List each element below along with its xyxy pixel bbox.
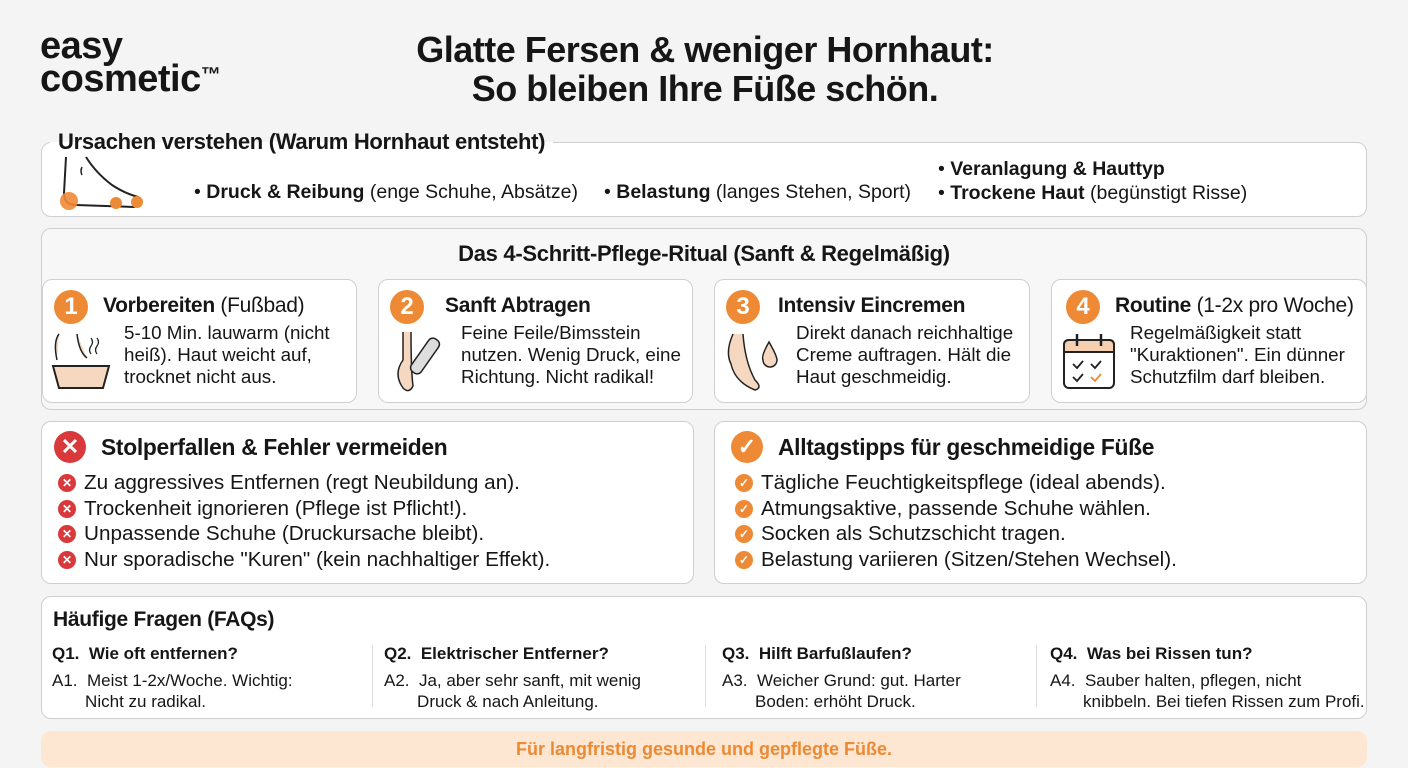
card 1: Vorbereiten (Fußbad) bbox=[103, 294, 304, 317]
mistakes list: ✕ bbox=[62, 552, 72, 566]
faq 3: A3. Weicher Grund: gut. Harter bbox=[722, 671, 961, 690]
heading: ritual: Das 4-Schritt-Pflege-Ritual (Sanft & Regelmäßig) bbox=[458, 241, 950, 266]
footer banner: Für langfristig gesunde und gepflegte Füße. bbox=[516, 739, 892, 759]
mistakes list bbox=[58, 471, 550, 570]
card 2: Richtung. Nicht radikal! bbox=[461, 366, 654, 387]
tips list: Tägliche Feuchtigkeitspflege (ideal abends). bbox=[761, 471, 1166, 494]
mistakes list: Nur sporadische "Kuren" (kein nachhaltiger Effekt). bbox=[84, 548, 550, 570]
tips list: Atmungsaktive, passende Schuhe wählen. bbox=[761, 496, 1151, 520]
icon: foot file bbox=[397, 332, 440, 392]
faq 4: Q4. Was bei Rissen tun? bbox=[1050, 644, 1252, 663]
icon: red x: ✕ bbox=[61, 434, 79, 459]
mistakes list: Trockenheit ignorieren (Pflege ist Pflicht!). bbox=[84, 496, 467, 520]
faq 4: A4. Sauber halten, pflegen, nicht bbox=[1050, 671, 1301, 690]
panel: mistakes bbox=[41, 421, 694, 584]
faq 1: Nicht zu radikal. bbox=[85, 692, 206, 711]
mistakes list: Zu aggressives Entfernen (regt Neubildung an). bbox=[84, 471, 520, 494]
card 2: Sanft Abtragen bbox=[445, 294, 591, 317]
tips list: ✓ bbox=[739, 527, 749, 541]
icon: calendar bbox=[1063, 334, 1115, 389]
tips list: ✓ bbox=[739, 552, 749, 566]
card 2: nutzen. Wenig Druck, eine bbox=[461, 344, 681, 365]
card 3: Creme auftragen. Hält die bbox=[796, 344, 1011, 365]
tips list: Socken als Schutzschicht tragen. bbox=[761, 522, 1066, 545]
heading: mistakes: Stolperfallen & Fehler vermeiden bbox=[101, 434, 447, 460]
card 3: Direkt danach reichhaltige bbox=[796, 322, 1013, 343]
faq 2: Druck & nach Anleitung. bbox=[417, 692, 599, 711]
faq 2: Q2. Elektrischer Entferner? bbox=[384, 644, 609, 663]
panel: ritual bbox=[41, 228, 1367, 410]
mistakes list: Unpassende Schuhe (Druckursache bleibt). bbox=[84, 522, 484, 545]
tips list: Belastung variieren (Sitzen/Stehen Wechsel). bbox=[761, 548, 1177, 570]
card 1: trocknet nicht aus. bbox=[124, 366, 276, 387]
icon: orange check: ✓ bbox=[738, 434, 756, 459]
card 1: heiß). Haut weicht auf, bbox=[124, 344, 312, 365]
logo: easy bbox=[40, 25, 123, 67]
tips list bbox=[735, 471, 1177, 570]
icon: orange check bbox=[731, 431, 763, 463]
faq 3: Boden: erhöht Druck. bbox=[755, 692, 916, 711]
heading: causes: Ursachen verstehen (Warum Hornhaut entsteht) bbox=[58, 129, 545, 154]
faq 2: A2. Ja, aber sehr sanft, mit wenig bbox=[384, 671, 641, 690]
panel: causes bbox=[41, 142, 1367, 217]
card 2 bbox=[378, 279, 693, 403]
card 4 bbox=[1051, 279, 1367, 403]
title: So bleiben Ihre Füße schön. bbox=[472, 68, 938, 109]
logo: cosmetic™ bbox=[40, 58, 220, 100]
card 1 bbox=[42, 279, 357, 403]
panel: causes: • Veranlagung & Hauttyp bbox=[938, 158, 1165, 180]
mistakes list: ✕ bbox=[62, 476, 72, 490]
card 4: Schutzfilm darf bleiben. bbox=[1130, 366, 1325, 387]
card 4: "Kuraktionen". Ein dünner bbox=[1130, 344, 1345, 365]
card 4: Regelmäßigkeit statt bbox=[1130, 322, 1301, 343]
faq 1: Q1. Wie oft entfernen? bbox=[52, 644, 238, 663]
card 1: 1 bbox=[64, 293, 78, 320]
faq 2 bbox=[384, 644, 641, 711]
heading: FAQ: Häufige Fragen (FAQs) bbox=[53, 608, 274, 631]
heading: tips: Alltagstipps für geschmeidige Füße bbox=[778, 434, 1154, 460]
footer banner bbox=[41, 731, 1367, 767]
faq 3 bbox=[722, 644, 961, 711]
card 4: Routine (1-2x pro Woche) bbox=[1115, 294, 1354, 317]
mistakes list: ✕ bbox=[62, 527, 72, 541]
title: Glatte Fersen & weniger Hornhaut: bbox=[416, 29, 994, 70]
panel: tips bbox=[714, 421, 1367, 584]
icon: red x bbox=[54, 431, 86, 463]
logo bbox=[40, 25, 220, 100]
cause list: • Druck & Reibung (enge Schuhe, Absätze) bbox=[194, 181, 578, 203]
panel: causes: • Trockene Haut (begünstigt Risse) bbox=[938, 182, 1247, 204]
card 2: Feine Feile/Bimsstein bbox=[461, 322, 641, 343]
faq 1: A1. Meist 1-2x/Woche. Wichtig: bbox=[52, 671, 293, 690]
panel: causes: • Belastung (langes Stehen, Sport) bbox=[604, 181, 911, 203]
panel: FAQ bbox=[41, 596, 1367, 719]
tips list: ✓ bbox=[739, 476, 749, 490]
card 3: Haut geschmeidig. bbox=[796, 366, 952, 387]
faq 4 bbox=[1050, 644, 1365, 711]
card 3: 3 bbox=[736, 293, 750, 320]
tips list: ✓ bbox=[739, 502, 749, 516]
card 3: Intensiv Eincremen bbox=[778, 294, 965, 317]
mistakes list: ✕ bbox=[62, 502, 72, 516]
faq 1 bbox=[52, 644, 293, 711]
title bbox=[416, 29, 994, 109]
card 1: 5-10 Min. lauwarm (nicht bbox=[124, 322, 330, 343]
card 3 bbox=[714, 279, 1030, 403]
faq 3: Q3. Hilft Barfußlaufen? bbox=[722, 644, 912, 663]
faq 4: knibbeln. Bei tiefen Rissen zum Profi. bbox=[1083, 692, 1365, 711]
icon: foot cream bbox=[728, 334, 778, 391]
card 2: 2 bbox=[400, 293, 414, 320]
icon: foot pressure bbox=[60, 156, 143, 210]
icon: foot bath bbox=[52, 334, 110, 389]
card 4: 4 bbox=[1076, 293, 1090, 320]
